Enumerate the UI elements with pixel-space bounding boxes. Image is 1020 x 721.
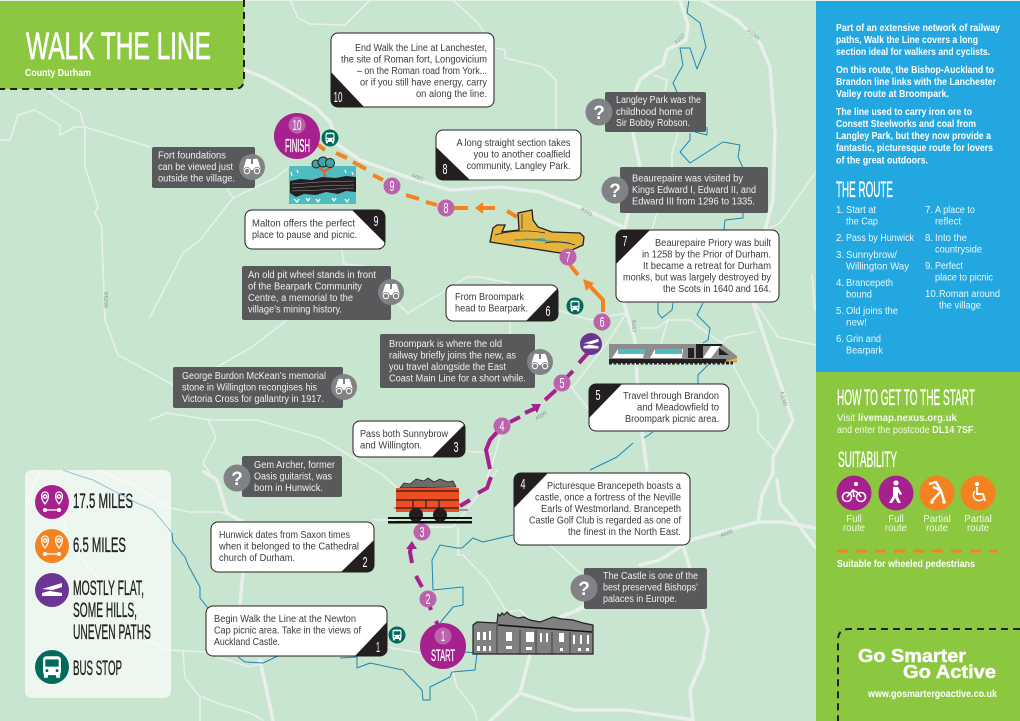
route list: left column: the Cap [846,216,878,228]
callout 7: Beaurepaire Priory: 7 [622,233,628,250]
callout 4: Brancepeth [514,473,690,545]
callout 5: Travel through Brandon: and Meadowfield to [637,402,719,414]
route list: left column: 1. [836,205,844,216]
road network [0,0,815,721]
route list: left column: 2. [836,233,844,244]
route list: right column: A place to [935,205,975,216]
route list: left column: Bearpark [846,346,883,356]
callout 2: Hunwick: Hunwick dates from Saxon times [219,530,350,541]
panel: getting there and suitability (green): SUITABILITY [838,447,897,472]
callout 9: Malton: 9 [374,213,378,230]
fact: pit wheel: of the Bearpark Community [248,282,362,292]
fact: Broompark: Coast Main Line for a short while. [389,374,526,384]
callout 8: long straight section: you to another coalfield [474,150,570,160]
fact: the Castle: best preserved Bishops’ [603,582,698,594]
route list: left column: new! [846,318,867,328]
intro text: Brandon line links with the Lanchester [836,77,996,88]
legend panel [25,470,171,698]
callout 6: From Broompark [446,285,558,321]
suitability: wheelchair [960,476,996,534]
directions text [837,413,976,436]
fact: Beaurepaire visitors: Beaurepaire was visited by [632,174,743,184]
callout 5: Travel through Brandon [589,384,729,431]
route list: left column: 4. [836,278,844,289]
road labels: A167 [630,320,636,332]
legend panel: BUS STOP [73,657,122,680]
finish marker: FINISH [285,136,310,156]
intro text: paths, Walk the Line covers a long [836,35,978,46]
callout 5: Travel through Brandon: Broompark picnic area. [625,414,719,425]
fact: Broompark: railway briefly joins the new, as [389,350,516,362]
rivers [172,0,743,700]
fact: George Burdon McKean: George Burdon McKean’s memorial [182,371,326,382]
legend: distance 17.5 miles [35,485,133,519]
route: orange section [318,145,603,312]
route list: right column: place to picnic [935,272,993,284]
waypoint markers: 6 [600,314,604,331]
road labels: A691 [410,173,424,183]
legend: terrain [35,573,151,644]
callout 3: Pass both Sunnybrow: 3 [454,439,458,456]
suitability: cycling [836,476,872,534]
fact: fort foundations: outside the village. [158,174,235,184]
start marker: START [431,646,455,665]
fact: Bobby Robson: ? [593,103,605,124]
route list: right column: reflect [935,216,961,228]
callout 1: Begin: Auckland Castle. [214,637,280,648]
callout 3: Pass both Sunnybrow: Pass both Sunnybrow [360,429,449,440]
directions text: and enter the postcode DL14 7SF. [837,425,976,436]
fact: the Castle: ? [578,579,590,600]
callout 9: Malton: place to pause and picnic. [252,230,357,241]
fact: Bobby Robson [586,92,706,132]
fact: fort foundations: can be viewed just [158,162,233,173]
fact: Broompark: you travel alongside the East [389,362,506,373]
fact: Beaurepaire visitors: Edward III from 1296 to 1335. [632,196,755,208]
directions text: Visit livemap.nexus.org.uk [837,413,958,424]
intro text: Consett Steelworks and coal from [836,119,976,130]
callout 9: Malton: Malton offers the perfect [252,218,355,230]
wheeled pedestrian label: Suitable for wheeled pedestrians [837,559,975,570]
suitability: cycling: route [843,523,865,534]
route list: right column: 10. [925,289,938,300]
terrain pin on route [580,333,602,355]
callout 4: Brancepeth: the finest in the North East. [568,527,681,538]
route list: left column: 6. [836,334,844,345]
callout 8: long straight section [436,130,581,180]
fact: Beaurepaire visitors: Kings Edward I, Edward II, and [632,185,756,196]
road labels: B6296 [102,292,108,308]
callout 7: Beaurepaire Priory: Beaurepaire Priory was built [655,238,771,249]
road labels: A690 [534,410,548,422]
fact: pit wheel: An old pit wheel stands in front [248,270,376,281]
callout 10: End at Lanchester: or if you still have energy, carry [360,78,487,88]
callout 2: Hunwick: when it belonged to the Cathedral [218,542,359,552]
intro text: Langley Park, but they now provide a [836,131,992,142]
callout 1: Begin: Cap picnic area. Take in the views of [214,626,361,636]
legend: bus stop [35,650,122,684]
route list: right column: Roman around [939,289,1000,300]
fact: Gem Archer: born in Hunwick. [254,483,323,494]
fact: the Castle [570,568,707,609]
route list: right column: countryside [935,244,982,256]
legend: distance 6.5 miles: 6.5 MILES [73,534,126,557]
intro text: of the great outdoors. [836,156,928,166]
callout 10: End at Lanchester: End Walk the Line at Lanchester, [355,43,487,54]
road labels: A691 [579,206,594,218]
route list: right column: 9. [925,261,933,272]
legend: terrain: MOSTLY FLAT, [73,577,144,600]
callout 9: Malton [245,210,385,249]
panel: getting there and suitability (green) [816,372,1020,721]
suitability: pushchair: Partial [923,514,951,525]
route list: left column: Pass by Hunwick [846,233,914,244]
suitability: walking: Full [888,514,904,525]
fact: pit wheel: village’s mining history. [248,304,342,316]
callout 5: Travel through Brandon: Travel through Brandon [623,391,719,402]
intro text: On this route, the Bishop-Auckland to [836,65,994,76]
logo panel [838,629,1020,721]
route list: left column: 3. [836,250,844,261]
illustration: train [609,344,737,363]
waypoint markers: 5 [560,375,564,392]
fact: Bobby Robson: Sir Bobby Robson. [616,118,690,129]
callout 10: End at Lanchester: on along the line. [416,89,487,100]
panel: about the route (blue) [816,1,1020,372]
fact: Bobby Robson: Langley Park was the [616,95,701,106]
callout 7: Beaurepaire Priory: the Scots in 1640 and 164. [663,284,771,295]
road labels: A1(M) [745,28,760,42]
route arrowheads: orange [475,202,594,291]
fact: the Castle: palaces in Europe. [603,594,677,605]
suitability: cycling: Full [846,514,862,525]
callout 7: Beaurepaire Priory: monks, but was largely destroyed by [623,272,771,284]
callout 7: Beaurepaire Priory: in 1258 by the Prior of Durham. [642,250,771,260]
website: www.gosmartergoactive.co.uk [867,689,998,700]
fact: fort foundations [152,147,265,188]
route list: right column [925,205,1000,312]
route list: left column: Grin and [846,334,881,345]
start marker [420,623,466,669]
waypoint markers: 9 [390,178,394,195]
fact: Beaurepaire visitors [602,167,768,213]
waypoint markers: 7 [566,249,570,266]
subtitle: County Durham [25,68,91,79]
callout 4: Brancepeth: Earls of Westmorland. Brancepeth [541,504,681,515]
road labels: A689 [720,529,734,539]
fact: Broompark: Broompark is where the old [389,339,502,350]
callout 10: End at Lanchester [331,33,494,107]
fact: Gem Archer: ? [231,469,243,490]
title text: WALK THE LINE [26,26,211,68]
fact: George Burdon McKean: Victoria Cross for gallantry in 1917. [182,394,324,405]
suitability: wheelchair: route [967,523,989,534]
bus stop icons on map [322,130,584,644]
route list: right column: Into the [935,233,967,244]
illustration: Auckland Castle [473,612,593,654]
intro text: Part of an extensive network of railway [836,23,1001,34]
route: magenta section [410,353,588,625]
callout 7: Beaurepaire Priory [616,230,779,302]
route list: right column: the village [939,300,981,312]
waypoint markers: 4 [500,418,504,435]
callout 2: Hunwick: 2 [362,554,368,571]
route list: right column: 7. [925,205,933,216]
start marker: 1 [441,628,445,645]
callout 10: End at Lanchester: the site of Roman fort, Longovicium [341,54,487,66]
road labels [102,28,788,539]
legend: distance 6.5 miles [35,529,126,563]
road labels: A167 [674,33,687,46]
callout 1: Begin: Begin Walk the Line at the Newton [214,614,356,625]
panel: about the route (blue): THE ROUTE [836,177,893,202]
route list: left column: bound [846,290,872,300]
fact: Broompark [380,334,553,388]
fact: pit wheel [242,266,404,320]
suitability: walking: route [885,523,907,534]
legend: distance 17.5 miles: 17.5 MILES [73,490,133,513]
callout 2: Hunwick [211,522,374,572]
legend: terrain: SOME HILLS, [73,599,137,622]
fact: Gem Archer: Oasis guitarist, was [254,472,332,482]
top edge strip [0,0,1020,1]
route list: left column [836,205,914,356]
fact: Bobby Robson: childhood home of [616,107,693,118]
finish marker: 10 [292,117,302,134]
fact: the Castle: The Castle is one of the [603,571,698,582]
route list: right column: Perfect [935,261,963,272]
fact: George Burdon McKean: stone in Willington recongises his [182,382,317,394]
intro text [836,23,1001,166]
fact: George Burdon McKean [173,367,357,408]
logo wordmark [858,646,996,682]
fact: Gem Archer [224,456,342,497]
route list: left column: Old joins the [846,306,898,317]
fact: fort foundations: Fort foundations [158,151,226,162]
route arrowheads: magenta [406,404,541,549]
callout 6: From Broompark: From Broompark [455,292,524,303]
logo wordmark: Go Smarter [858,646,966,666]
callout 4: Brancepeth: castle, once a fortress of the Neville [535,492,681,504]
route list: left column: Sunnybrow/ [846,250,897,261]
fact: Gem Archer: Gem Archer, former [254,460,336,471]
map background [0,0,816,721]
intro text: Valley route at Broompark. [836,89,949,100]
suitability: pushchair: route [926,523,948,534]
intro text: fantastic, picturesque route for lovers [836,143,993,154]
route list: left column: Willington Way [846,262,909,272]
waypoint markers: 8 [444,200,448,217]
callout 7: Beaurepaire Priory: It became a retreat for Durham [643,261,771,272]
callout 8: long straight section: 8 [442,161,448,178]
finish marker [274,113,320,159]
legend panel: UNEVEN PATHS [73,621,151,644]
logo wordmark: Go Active [903,662,996,682]
route list: left column: Start at [846,205,876,216]
callout 8: long straight section: community, Langley Park. [466,161,570,172]
fact: Beaurepaire visitors: ? [609,181,621,202]
intro text: section ideal for walkers and cyclists. [836,47,990,58]
callout 6: From Broompark: head to Bearpark. [455,304,528,314]
callout 10: End at Lanchester: – on the Roman road from York... [357,66,487,77]
callout 4: Brancepeth: 4 [520,476,526,493]
waypoint markers [384,178,610,608]
illustration: Malton ruin [289,157,356,204]
callout 1: Begin [206,606,387,656]
callout 2: Hunwick: church of Durham. [219,553,295,564]
callout 1: Begin: 1 [376,639,380,656]
suitability: pushchair [920,476,954,534]
wheeled pedestrian dashed key [837,550,998,552]
title panel [0,0,244,89]
callout 10: End at Lanchester: 10 [334,89,342,106]
route list: left column: Brancepeth [846,278,893,289]
road labels: A1(M) [778,391,788,407]
suitability: walking [878,476,914,534]
route list: right column: 8. [925,233,933,244]
callout 5: Travel through Brandon: 5 [596,387,600,404]
intro text: The line used to carry iron ore to [836,107,972,118]
callout 3: Pass both Sunnybrow [353,421,465,457]
callout 8: long straight section: A long straight section takes [456,138,571,149]
waypoint markers: 3 [420,524,424,541]
route list: left column: 5. [836,306,844,317]
callout 4: Brancepeth: Picturesque Brancepeth boasts a [547,481,682,492]
waypoint markers: 2 [426,591,430,608]
fact: pit wheel: Centre, a memorial to the [248,293,353,304]
callout 3: Pass both Sunnybrow: and Willington. [360,440,422,452]
suitability: wheelchair: Partial [964,514,992,525]
callout 6: From Broompark: 6 [546,303,550,320]
callout 4: Brancepeth: Castle Golf Club is regarded as one of [529,516,681,526]
illustration: Beaurepaire Priory ruin [490,210,584,253]
faint river through legend [63,470,172,533]
illustration: coal wagon [388,478,472,524]
